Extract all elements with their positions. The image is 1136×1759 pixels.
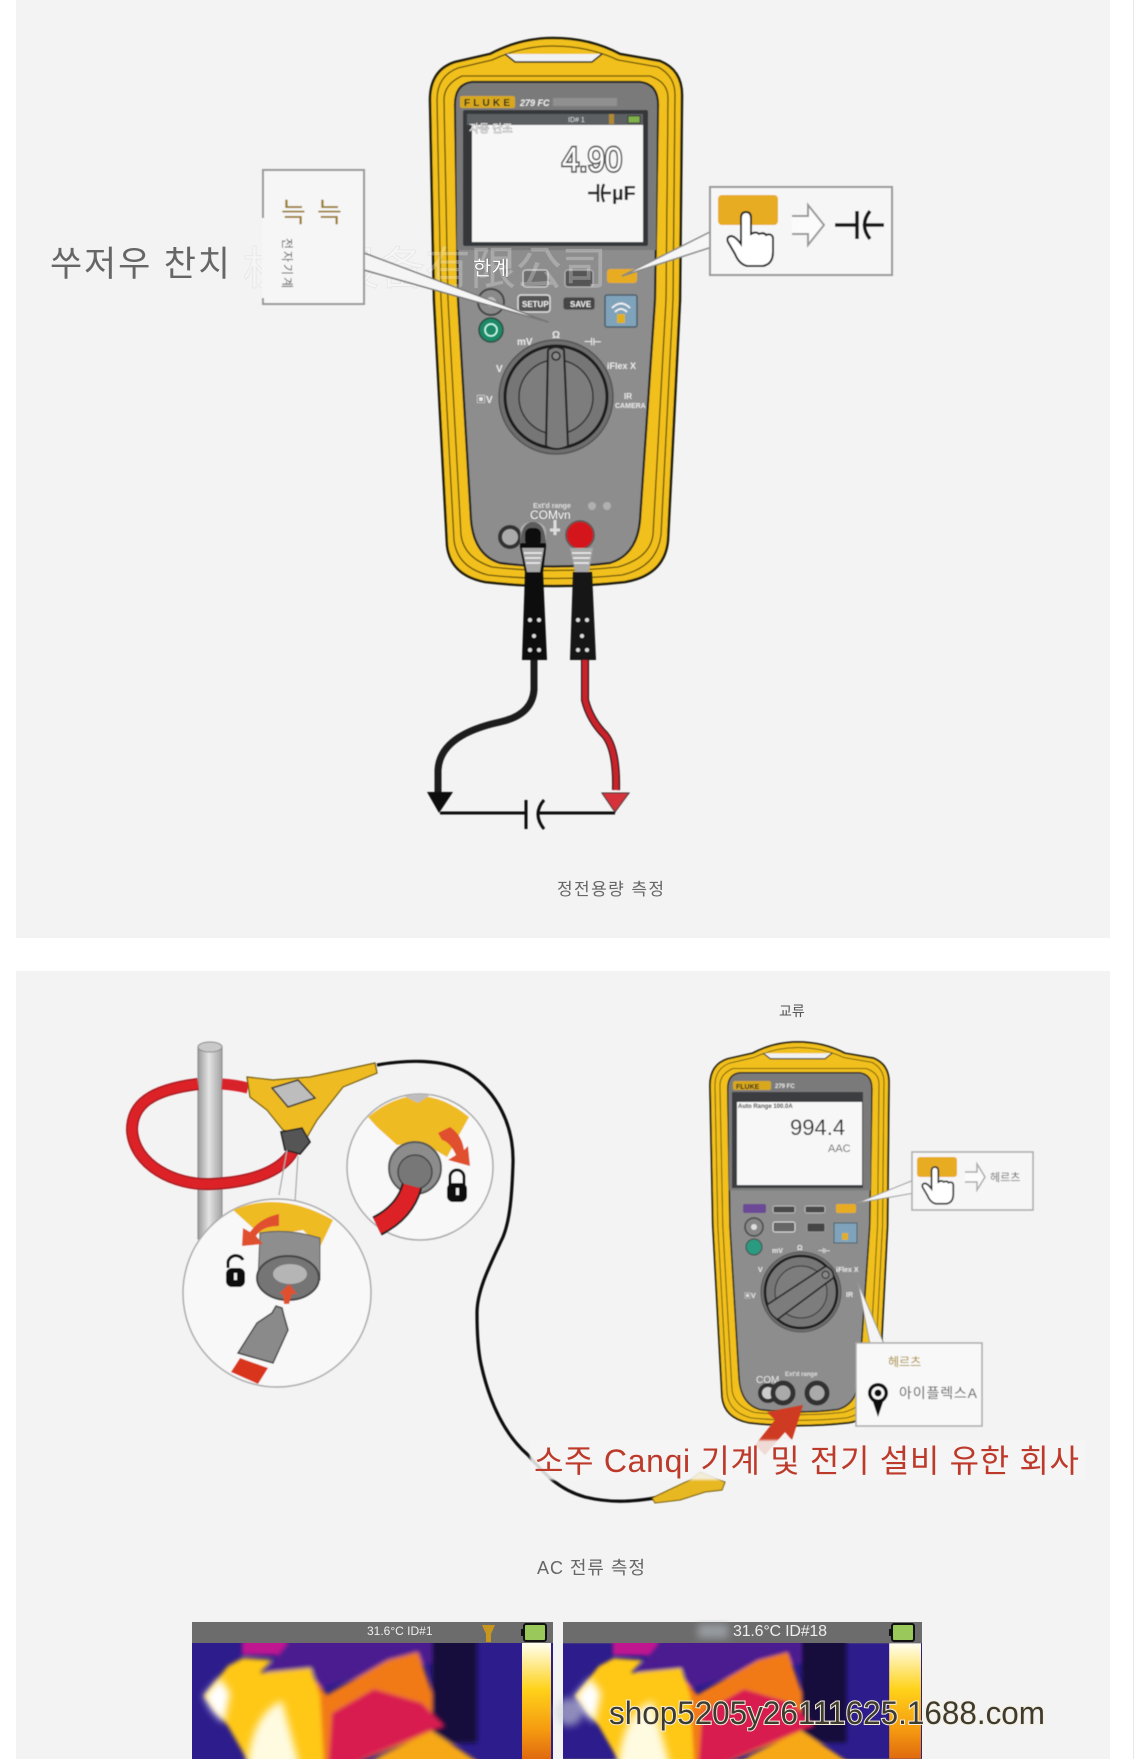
panel: AC current measurement <box>16 971 1110 1759</box>
blurred patch <box>698 1624 728 1638</box>
input jacks: Ext'd range <box>785 1372 818 1378</box>
yellow button <box>718 195 778 225</box>
leader wedge <box>858 1283 884 1344</box>
multimeter: capacitance mode <box>430 38 682 586</box>
status text: 자동 단조 <box>469 122 513 135</box>
page edge line <box>1133 0 1134 1759</box>
capacitor symbol circuit <box>440 800 615 829</box>
front panel buttons <box>743 1204 857 1255</box>
lock icon <box>226 1256 245 1287</box>
input jacks <box>756 1372 827 1403</box>
dial labels: iFlex X <box>607 361 636 371</box>
panel: capacitance measurement <box>16 0 1110 938</box>
dial labels: ⊣⊢ <box>584 337 602 348</box>
callout box <box>263 170 364 304</box>
brand label: 279 FC <box>775 1084 795 1090</box>
dial labels: Ω <box>552 330 560 341</box>
yellow sector <box>233 1202 333 1247</box>
iFlex label: 아이플렉스A <box>899 1385 978 1401</box>
control label: 한계 <box>473 257 510 280</box>
callout: rotary position <box>262 170 548 322</box>
camera reading: 31.6°C ID#1 <box>367 1624 433 1638</box>
lock icon <box>447 1170 467 1202</box>
yellow iFlex connector plug <box>652 1472 725 1503</box>
brand label <box>733 1081 795 1091</box>
swing arrow <box>242 1214 279 1246</box>
shop URL: shop5205y26111625.1688.com <box>609 1695 1045 1731</box>
front panel buttons: SAVE <box>570 300 592 309</box>
colour scale <box>889 1643 921 1759</box>
red cable <box>377 1186 412 1226</box>
insert arrow <box>279 1284 297 1304</box>
dial labels: ▣V <box>476 394 493 406</box>
vertical label: 전자기계 <box>280 238 294 288</box>
brand label: FLUKE <box>464 98 510 109</box>
unit <box>588 183 636 205</box>
hand icon <box>922 1167 953 1204</box>
probe plug <box>238 1306 288 1363</box>
input jacks: COM <box>756 1375 779 1386</box>
leader wedge <box>857 1180 914 1203</box>
front panel buttons: SETUP <box>522 300 549 309</box>
battery <box>521 1624 546 1641</box>
pole <box>198 1042 222 1239</box>
dial labels: V <box>758 1267 763 1274</box>
rotary dial <box>499 340 613 454</box>
reading: 4.90 <box>562 141 622 179</box>
thermal image: right <box>563 1622 922 1759</box>
detail circle: unlocked <box>183 1199 371 1387</box>
callout: function button capacitance <box>622 187 892 276</box>
text halo <box>530 1440 1085 1480</box>
lock arrow <box>438 1127 470 1166</box>
dial labels: ▣V <box>744 1292 756 1300</box>
hand icon <box>727 212 773 266</box>
thermal image: left <box>192 1622 553 1759</box>
wifi icon <box>482 1625 495 1642</box>
screen <box>732 1092 863 1188</box>
gold capacitor glyph two: 늑 <box>317 198 342 228</box>
battery <box>889 1624 914 1641</box>
arrow <box>792 205 824 245</box>
arrow <box>965 1164 985 1190</box>
test lead: black <box>427 522 547 813</box>
flexible loop <box>222 1084 248 1088</box>
label: AC: 교류 <box>779 1003 805 1019</box>
input jacks: Ext'd range <box>533 503 571 510</box>
gold hertz label: 헤르츠 <box>888 1355 921 1369</box>
caption: capacitance measurement: 정전용량 측정 <box>557 880 664 899</box>
connector <box>258 1231 320 1280</box>
brand label: 279 FC <box>519 98 550 108</box>
pin icon <box>868 1383 888 1417</box>
iFlex probe <box>132 1063 377 1202</box>
rotary dial <box>761 1252 841 1332</box>
detail circle: locked <box>347 1094 493 1240</box>
dial labels: CAMERA <box>615 403 646 410</box>
leader wedge <box>622 231 712 276</box>
jack label: COMvn <box>530 508 571 522</box>
callout: function button hertz <box>857 1152 1033 1210</box>
reading: 994.4 <box>790 1115 845 1140</box>
dial labels <box>744 1245 859 1300</box>
leader lines <box>279 1150 298 1202</box>
hertz label: 헤르츠 <box>990 1171 1020 1184</box>
brand label: FLUKE <box>736 1084 760 1091</box>
screen: ID# 1 <box>568 117 585 124</box>
unit: AAC <box>828 1143 851 1155</box>
dial labels <box>476 330 646 410</box>
dial labels: IR <box>846 1292 853 1299</box>
red cable end <box>231 1358 268 1384</box>
thermal scene <box>192 1643 553 1759</box>
gold capacitor glyphs: 늑 <box>281 198 306 228</box>
brand label <box>460 96 617 109</box>
sensor cable <box>377 1061 655 1501</box>
dial labels: Ω <box>797 1245 803 1252</box>
leader wedge <box>364 253 548 322</box>
test lead: red <box>566 521 629 812</box>
unit: µF <box>612 183 636 205</box>
dial labels: IR <box>624 392 632 401</box>
red arrow to jack <box>755 1405 803 1455</box>
connector <box>281 1128 310 1154</box>
dial labels: iFlex X <box>836 1267 859 1274</box>
thermal scene <box>563 1643 922 1759</box>
callout: iFlex position <box>856 1283 982 1426</box>
colour scale <box>522 1643 551 1759</box>
caption: AC current measurement: AC 전류 측정 <box>537 1558 645 1578</box>
watermark smudge <box>555 1698 583 1726</box>
input jacks <box>500 502 611 547</box>
capacitor symbol <box>835 211 884 239</box>
yellow button <box>917 1157 957 1177</box>
dial labels: mV <box>517 337 533 348</box>
company name in red: 소주 Canqi 기계 및 전기 설비 유한 회사 <box>534 1443 1079 1479</box>
yellow clamp <box>247 1063 377 1137</box>
dial labels: mV <box>772 1248 783 1255</box>
screen <box>463 110 648 246</box>
camera reading: 31.6°C ID#18 <box>733 1623 827 1640</box>
dial labels: V <box>496 364 503 375</box>
side label: Suzhou Canqi: 쑤저우 찬치 <box>50 245 230 284</box>
yellow sector <box>368 1096 469 1157</box>
front panel buttons <box>478 269 637 342</box>
watermark: 机电设备有限公司 <box>243 243 607 294</box>
range text: Auto Range 100.0A <box>738 1104 793 1110</box>
connector <box>389 1142 441 1194</box>
multimeter: AC current mode <box>710 1042 889 1426</box>
dial labels: ⊣⊢ <box>818 1247 830 1255</box>
